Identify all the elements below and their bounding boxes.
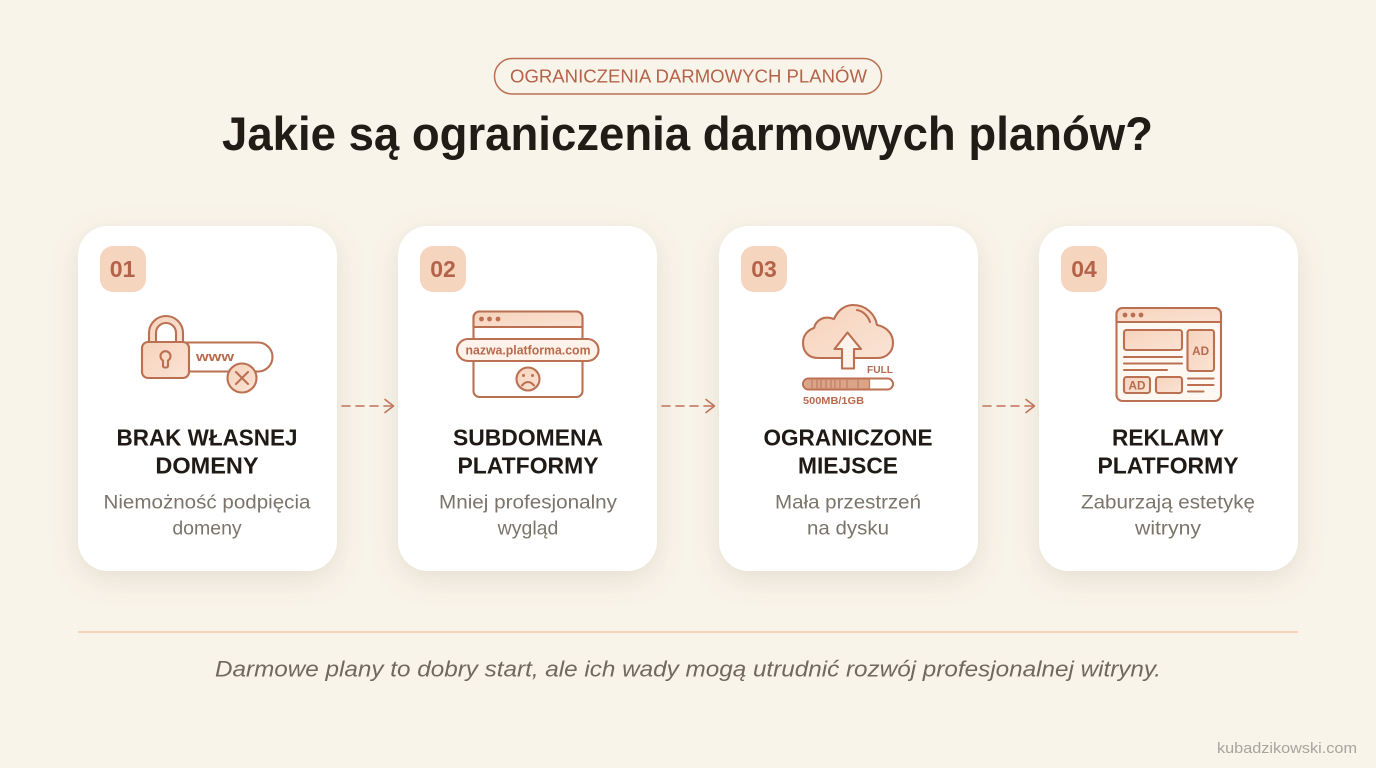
icon: cloud upload with storage bar: 500MB/1GB bbox=[803, 395, 864, 407]
card 1 heading: BRAK WŁASNEJ bbox=[116, 424, 298, 450]
tag pill: OGRANICZENIA DARMOWYCH PLANÓW bbox=[510, 66, 867, 86]
title: Jakie są ograniczenia darmowych planów? bbox=[222, 107, 1153, 160]
card 4 description bbox=[1081, 492, 1255, 540]
card 3 description bbox=[775, 492, 921, 540]
icon: browser window with subdomain bbox=[457, 312, 598, 397]
icon: cloud upload with storage bar bbox=[803, 305, 894, 407]
card 2 description bbox=[439, 492, 617, 540]
card 3 description: Mała przestrzeń bbox=[775, 492, 921, 514]
icon: web page with ads: AD bbox=[1128, 380, 1146, 392]
badge 03 bbox=[741, 246, 787, 292]
card 4 heading: REKLAMY bbox=[1112, 424, 1224, 450]
card 3 heading bbox=[764, 424, 932, 478]
badge 01: 01 bbox=[110, 256, 135, 282]
card 2 description: Mniej profesjonalny bbox=[439, 492, 617, 514]
card 2 description: wygląd bbox=[497, 518, 558, 540]
panel: card 3 bbox=[719, 226, 978, 571]
tag pill bbox=[494, 58, 882, 94]
card 3 description: na dysku bbox=[807, 518, 889, 540]
card 2 heading: PLATFORMY bbox=[458, 452, 599, 478]
card 4 heading: PLATFORMY bbox=[1098, 452, 1239, 478]
card 2 heading: SUBDOMENA bbox=[453, 424, 603, 450]
card 4 description: witryny bbox=[1134, 518, 1201, 540]
badge 04 bbox=[1061, 246, 1107, 292]
panel: card 2 bbox=[398, 226, 657, 571]
icon: padlock and www address with x bbox=[142, 316, 272, 392]
icon: web page with ads bbox=[1116, 308, 1221, 401]
closing note: Darmowe plany to dobry start, ale ich wady mogą utrudnić rozwój profesjonalnej witryny. bbox=[215, 656, 1161, 682]
card 1 heading bbox=[116, 424, 298, 478]
card 1 description: Niemożność podpięcia bbox=[104, 492, 311, 514]
icon: browser window with subdomain: nazwa.platforma.com bbox=[466, 342, 590, 358]
badge 02: 02 bbox=[430, 256, 456, 282]
panel: card 4 bbox=[1039, 226, 1298, 571]
card 1 description bbox=[104, 492, 311, 540]
badge 03: 03 bbox=[751, 256, 777, 282]
arrow 1 bbox=[342, 400, 394, 412]
watermark: kubadzikowski.com bbox=[1217, 740, 1357, 757]
panel: card 1 bbox=[78, 226, 337, 571]
card 3 heading: OGRANICZONE bbox=[764, 424, 932, 450]
card 3 heading: MIEJSCE bbox=[798, 452, 898, 478]
icon: web page with ads: AD bbox=[1192, 346, 1209, 358]
card 1 description: domeny bbox=[172, 518, 242, 540]
icon: padlock and www address with x: www bbox=[195, 349, 235, 364]
arrow 3 bbox=[983, 400, 1034, 412]
card 4 description: Zaburzają estetykę bbox=[1081, 492, 1255, 514]
card 2 heading bbox=[453, 424, 603, 478]
card 1 heading: DOMENY bbox=[155, 452, 259, 478]
icon: cloud upload with storage bar: FULL bbox=[867, 364, 894, 376]
badge 04: 04 bbox=[1071, 256, 1097, 282]
card 4 heading bbox=[1098, 424, 1239, 478]
badge 02 bbox=[420, 246, 466, 292]
arrow 2 bbox=[662, 400, 714, 412]
badge 01 bbox=[100, 246, 146, 292]
